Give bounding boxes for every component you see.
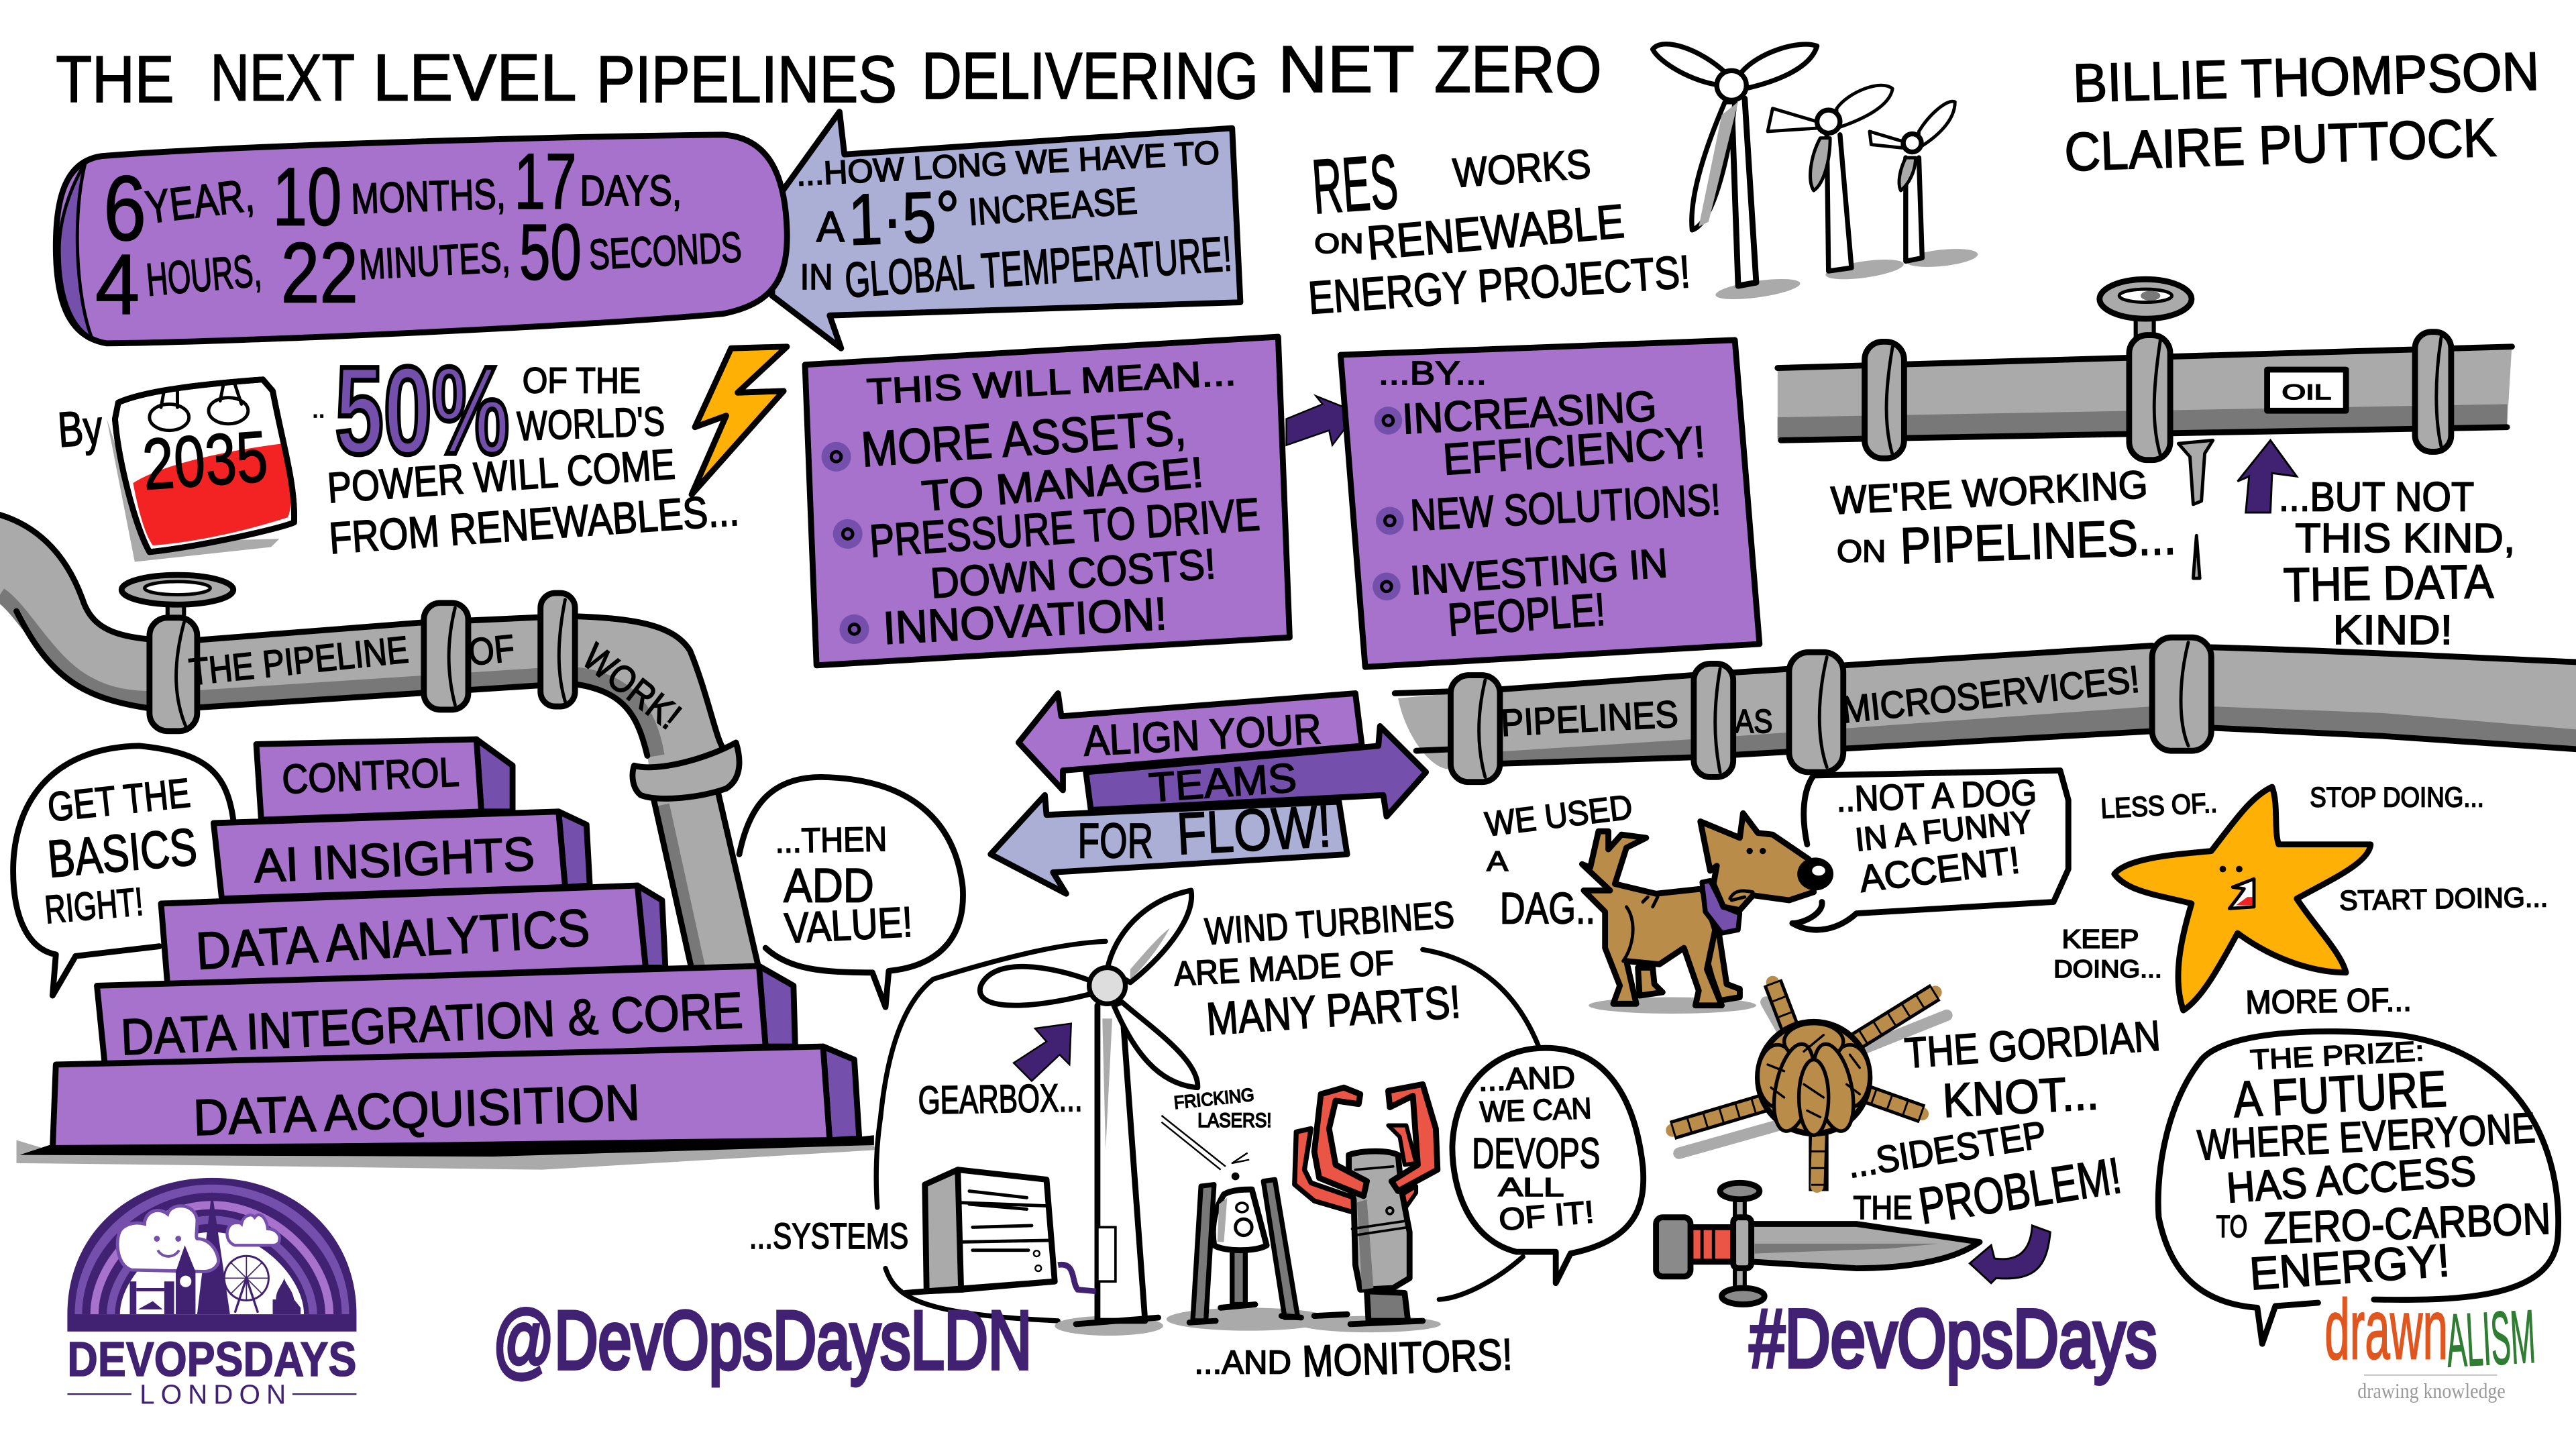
panel: 1.5 degree arrow: IN (800, 257, 833, 297)
panel: this will mean: TO MANAGE! (920, 448, 1205, 521)
text: we used a DAG (1483, 787, 1634, 933)
logo: devopsdays london: DEVOPSDAYS (67, 1333, 356, 1387)
icon: server box (905, 1170, 1095, 1293)
label: oil: OIL (2282, 380, 2331, 404)
title: DELIVERING (922, 39, 1258, 113)
pipe: the pipeline of work: WORK! (575, 635, 689, 737)
stat: 50 percent: FROM RENEWABLES... (327, 486, 741, 564)
step: data analytics: DATA ANALYTICS (195, 898, 592, 981)
text: we used a DAG: A (1487, 845, 1508, 877)
panel: countdown: 10 (273, 151, 341, 243)
panel: this will mean: INNOVATION! (881, 588, 1168, 654)
text: speakers (2063, 42, 2540, 183)
panel: countdown: SECONDS (588, 223, 743, 279)
speech bubble: the prize: HAS ACCESS (2225, 1147, 2477, 1212)
speech bubble: devops all of it: WE CAN (1479, 1092, 1592, 1129)
text: star labels (2053, 781, 2548, 1021)
arrow: not this kind (2238, 440, 2297, 513)
speech bubble: devops all of it: DEVOPS (1472, 1130, 1600, 1177)
panel: countdown (56, 135, 787, 343)
text: star labels: LESS OF.. (2100, 787, 2218, 824)
icon: gordian knot (1672, 982, 1947, 1191)
panel: 1.5 degree arrow (772, 112, 1240, 348)
panel: countdown: YEAR, (143, 169, 257, 233)
text: RES works: RES (1309, 139, 1401, 230)
text: wind turbine parts: MANY PARTS! (1205, 976, 1462, 1045)
pipe: pipelines as microservices: PIPELINES (1500, 692, 1679, 744)
panel: by: EFFICIENCY! (1442, 417, 1707, 485)
panel: by: INVESTING IN (1409, 540, 1669, 603)
hashtag: devopsdays ldn twitter: @DevOpsDaysLDN (493, 1294, 1032, 1386)
speech bubble: devops all of it: ...AND (1478, 1059, 1576, 1097)
speech bubble: get the basics right: BASICS (45, 817, 199, 889)
speech bubble: get the basics right: RIGHT! (43, 880, 145, 932)
text: RES works (1307, 139, 1692, 324)
arrow: curved to sword (1970, 1226, 2050, 1283)
icon: calendar 2035 (107, 380, 294, 562)
cloud: small (227, 1215, 280, 1245)
leak drips (2178, 440, 2213, 578)
arrow: for flow (991, 793, 1347, 894)
text: RES works: RENEWABLE (1365, 195, 1626, 270)
panel: by: NEW SOLUTIONS! (1409, 475, 1722, 541)
pyramid shadow (16, 1137, 875, 1170)
diagram: data pyramid (16, 739, 875, 1170)
panel: countdown: 4 (95, 237, 140, 332)
panel: countdown: 6 (103, 158, 146, 260)
logo: drawnalism: drawing knowledge (2357, 1379, 2506, 1403)
pipe: pipelines as microservices (1395, 637, 2576, 782)
speech bubble: devops all of it (1452, 1048, 1644, 1283)
text: star labels: KEEP (2061, 925, 2139, 954)
text: gordian knot: THE (1853, 1190, 1913, 1226)
speech bubble: devops all of it: OF IT! (1497, 1194, 1595, 1237)
panel: 1.5 degree arrow: INCREASE (967, 179, 1138, 233)
icon: calendar 2035: 2035 (140, 415, 270, 505)
text: the data kind: THIS KIND, (2295, 515, 2515, 561)
panel: countdown: HOURS, (144, 244, 263, 306)
speech bubble: not a dog (1792, 771, 2068, 930)
text: wind turbine parts: ARE MADE OF (1173, 943, 1395, 993)
logo: devopsdays london: LONDON (140, 1379, 286, 1409)
panel: 1.5 degree arrow: ...HOW LONG WE HAVE TO (796, 135, 1220, 193)
text: and monitors: MONITORS! (1301, 1330, 1513, 1387)
text: star labels: STOP DOING... (2310, 781, 2484, 812)
text: gordian knot: THE GORDIAN (1903, 1012, 2162, 1077)
step: data acquisition (19, 1046, 874, 1157)
step: control (256, 739, 513, 820)
panel: this will mean (805, 337, 1289, 665)
icon: three wind turbines (1653, 44, 1979, 303)
speech bubble: get the basics right (13, 746, 233, 996)
stat: 50 percent (312, 341, 741, 564)
title: LEVEL (373, 40, 577, 114)
pipe: pipelines as microservices: AS (1735, 704, 1772, 740)
pipe: oil pipeline (1778, 279, 2512, 578)
panel: countdown: 50 (519, 208, 582, 296)
arrow: align your: ALIGN YOUR (1082, 705, 1323, 765)
text: systems: ...SYSTEMS (749, 1216, 908, 1256)
panel: by: PEOPLE! (1446, 584, 1607, 646)
panel: this will mean: MORE ASSETS, (859, 399, 1188, 477)
speech bubble: the prize: A FUTURE (2232, 1061, 2448, 1128)
panel: by: INCREASING (1401, 382, 1658, 443)
step: AI insights: AI INSIGHTS (253, 828, 536, 893)
text: gordian knot (1845, 1012, 2162, 1235)
speech bubble: the prize: TO (2216, 1209, 2247, 1244)
text: By: By (56, 399, 104, 458)
arrow: teams: TEAMS (1147, 755, 1298, 810)
panel: 1.5 degree arrow: GLOBAL TEMPERATURE! (843, 225, 1234, 308)
stat: 50 percent: OF THE (523, 360, 641, 400)
icon: laser robot (1161, 1116, 1331, 1331)
stat: 50 percent: WORLD'S (517, 398, 665, 449)
text: gordian knot: ...SIDESTEP (1845, 1113, 2049, 1186)
banner: align your teams for flow (991, 693, 1426, 894)
text: gordian knot: KNOT... (1941, 1067, 2100, 1128)
speech bubble: then add value: ADD (784, 859, 874, 912)
speech bubble: the prize: ENERGY! (2248, 1234, 2451, 1299)
arrow: teams (1086, 726, 1426, 816)
speech bubble: get the basics right: GET THE (46, 770, 193, 830)
panel: by (1340, 340, 1760, 667)
icon: sword (1656, 1183, 1980, 1304)
text: star labels: MORE OF... (2245, 982, 2412, 1021)
valve (2100, 279, 2192, 341)
skyline (129, 1191, 301, 1314)
pipe: pipelines as microservices: MICROSERVICES! (1839, 657, 2141, 731)
text: wind turbine parts (1173, 893, 1462, 1045)
text: gearbox: GEARBOX... (918, 1076, 1083, 1122)
text: fricking lasers (1173, 1085, 1272, 1132)
text: star labels: DOING... (2053, 955, 2162, 983)
icon: robot arm monitor (1295, 1084, 1441, 1332)
panel: countdown: MINUTES, (358, 233, 511, 288)
text: the data kind: KIND! (2333, 607, 2453, 653)
step: AI insights (213, 812, 590, 899)
big ben (176, 1245, 195, 1314)
stat: 50 percent: 50% (335, 341, 509, 480)
panel: by: ...BY... (1379, 356, 1487, 392)
panel: this will mean: DOWN COSTS! (929, 540, 1218, 607)
hashtag: devopsdays: #DevOpsDays (1750, 1293, 2157, 1385)
text: we used a DAG: DAG.. (1500, 883, 1595, 933)
speech bubble: then add value: VALUE! (784, 898, 914, 953)
pipe: the pipeline of work (0, 513, 759, 973)
pipe: the pipeline of work: OF (466, 627, 517, 674)
text: working on pipelines: PIPELINES... (1899, 508, 2177, 575)
arrow: for flow: FOR (1078, 812, 1153, 868)
text: fricking lasers: FRICKING (1173, 1085, 1255, 1113)
panel: countdown: 17 (515, 138, 577, 225)
text: RES works: WORKS (1452, 141, 1592, 196)
pipe labels: THE PIPELINE (187, 628, 411, 693)
text: RES works: ON (1314, 227, 1364, 259)
icon: retrospective star (2114, 787, 2371, 1010)
text: speakers: CLAIRE PUTTOCK (2063, 107, 2498, 183)
title: PIPELINES (596, 42, 897, 116)
step: control: CONTROL (281, 749, 460, 802)
text: working on pipelines: WE'RE WORKING (1830, 463, 2149, 523)
text: gordian knot: PROBLEM! (1915, 1147, 2125, 1235)
panel: this will mean: PRESSURE TO DRIVE (868, 488, 1261, 567)
icon: lightning bolt (692, 347, 787, 494)
text: the data kind: THE DATA (2283, 555, 2494, 612)
speech bubble: then add value: ...THEN (775, 819, 888, 860)
arrow: align your (1018, 693, 1362, 790)
speech bubble: the prize: THE PRIZE: (2249, 1035, 2425, 1075)
title (56, 32, 1602, 116)
title: NEXT (210, 40, 355, 114)
text: and monitors (1194, 1330, 1513, 1387)
speech bubble: the prize (2158, 1032, 2559, 1344)
step: data acquisition: DATA ACQUISITION (193, 1074, 641, 1146)
label: oil (2267, 370, 2346, 411)
speech bubble: devops all of it: ALL (1498, 1173, 1564, 1202)
outline: turbine parts cloud (876, 941, 1540, 1321)
panel: countdown: DAYS, (580, 167, 682, 215)
text: wind turbine parts: WIND TURBINES (1203, 893, 1456, 953)
text: speakers: BILLIE THOMPSON (2072, 42, 2540, 114)
icon: large wind turbine (980, 890, 1197, 1336)
icon: dog (1582, 813, 1833, 1014)
text: the data kind (2279, 474, 2515, 653)
text: fricking lasers: LASERS! (1197, 1110, 1272, 1132)
logo: devopsdays london (67, 1178, 356, 1409)
text: star labels: START DOING... (2339, 881, 2548, 916)
text: the data kind: ...BUT NOT (2279, 474, 2474, 520)
panel: 1.5 degree arrow: 1·5° (847, 175, 961, 260)
speech bubble: not a dog: ..NOT A DOG (1835, 772, 2037, 820)
panel: 1.5 degree arrow: A (816, 203, 845, 251)
valve (121, 575, 233, 625)
speech bubble: not a dog: ACCENT! (1857, 839, 2022, 900)
title: NET (1278, 32, 1415, 106)
text: working on pipelines: ON (1837, 534, 1886, 569)
text: working on pipelines (1830, 463, 2177, 575)
panel: this will mean: THIS WILL MEAN... (866, 353, 1237, 412)
title: ZERO (1434, 32, 1602, 106)
panel: countdown: MONTHS, (350, 170, 506, 223)
title: THE (56, 42, 174, 116)
panel: countdown: 22 (281, 225, 358, 321)
stat: 50 percent: POWER WILL COME (326, 440, 677, 512)
arrow: to gearbox (1014, 1024, 1071, 1081)
logo: drawnalism: drawn (2324, 1281, 2448, 1377)
text: RES works: ENERGY PROJECTS! (1307, 246, 1692, 324)
speech bubble: not a dog: IN A FUNNY (1854, 804, 2034, 859)
cloud: large smiley (117, 1206, 219, 1272)
step: data integration and core: DATA INTEGRATION & CORE (119, 982, 744, 1066)
speech bubble: then add value (739, 777, 963, 1007)
text: we used a DAG: WE USED (1483, 787, 1634, 843)
arrow: for flow: FLOW! (1175, 793, 1333, 867)
stat: 50 percent: .. (312, 397, 325, 423)
text: and monitors: ...AND (1194, 1344, 1291, 1381)
arrow: mean to by (1287, 396, 1357, 445)
